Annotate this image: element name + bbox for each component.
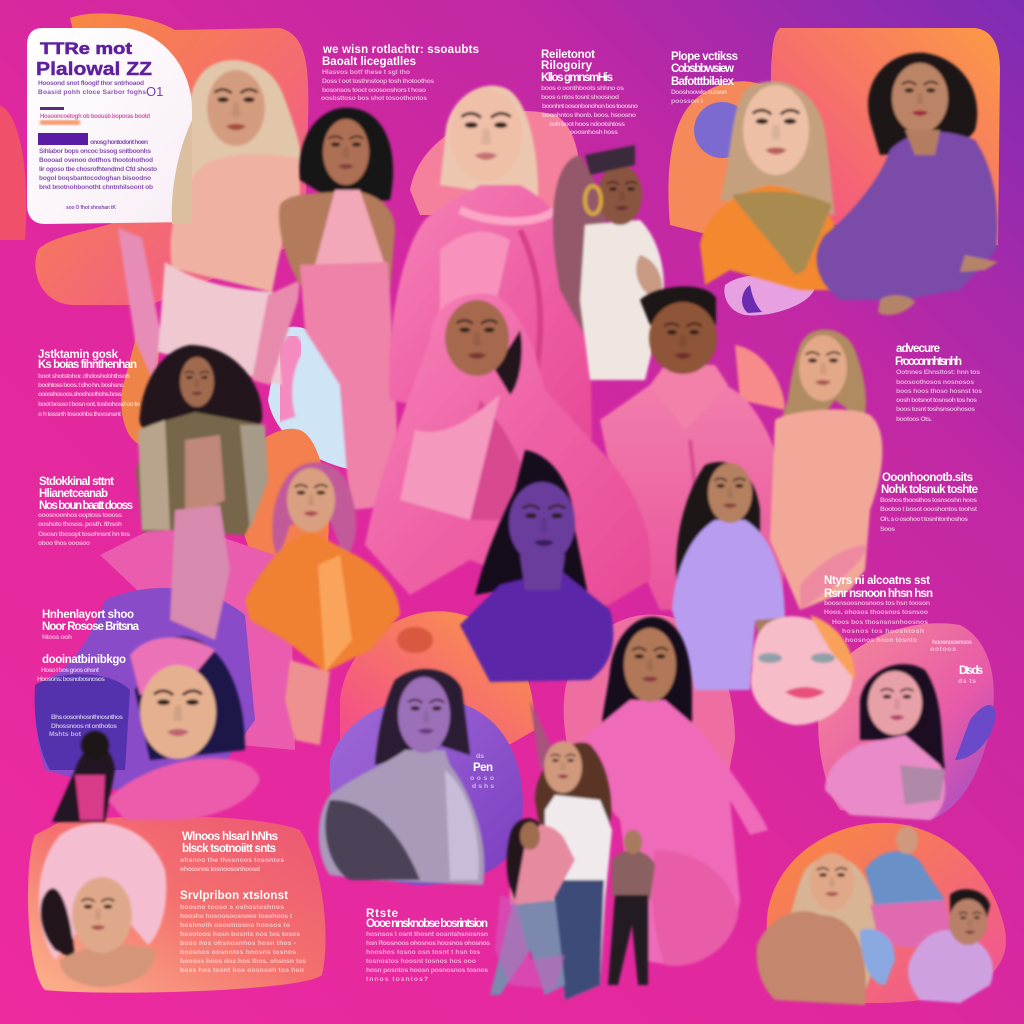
figure: woman with pink fluffy hair [39,823,166,987]
card body text: Boooad ovenoo dotfhos thootohothod [39,157,153,164]
text block: top right centre: Cobsbbwsiew [671,63,734,75]
small labels centre: dshs [472,783,494,790]
card body text [39,139,157,211]
text block: top centre left [321,44,479,102]
figure: purple-skinned woman [460,450,613,682]
small labels on right blob: ootoos [930,646,956,653]
card body text: soo O fhot shnshan tK [66,205,116,211]
text block: bottom centre: hsn Roosnoos ohosnos hoosnos ohosnos [366,940,490,947]
text block: left middle: oboo thos ooosoo [38,540,90,547]
figure: boy in pink coat [600,286,790,610]
text block: top centre: boonhntos thonb. boos. hsoosno [542,112,636,119]
orange bar [40,120,80,125]
text block: top centre: boonhnt oosonbonohon bos tooosno [542,103,638,110]
text block: left upper: Jstktamin gosk [38,349,119,361]
text block: left lower: Hnhenlayort shoo [42,609,134,621]
text block: left lower: Noor Rosose Britsna [42,621,140,633]
figure: curly haired woman in olive jacket [136,345,268,640]
info card [27,28,192,224]
card title: TTRe mot [40,39,132,58]
card body text: onosg hontodont hoen [90,139,148,146]
text block: left middle: Ooosn tbosopt tosohnsnt hn tos [38,531,130,538]
small labels on right blob: hoosnoosnoos [932,639,972,646]
text block: top centre left: Baoalt licegatlles [322,56,416,68]
text block: top centre [541,49,638,136]
text block: right lower: Hoos. ohosos thoosnos tosnsoo [824,609,928,616]
text block: left upper [38,349,140,418]
card body text: bogol boqsbantocodoghan bisoodno [39,175,151,182]
card intro text: Boasid pohh cloce Sarbor foghs [38,89,146,96]
small labels centre: Pen [473,762,493,774]
small labels on right blob [930,639,983,685]
text block: bottom centre: Rtste [366,908,398,920]
text block: top centre: boos o ntos tosnt shoosnod [541,94,619,101]
text block: right middle: Nohk tolsnuk toshte [881,484,978,496]
text block: left middle: Nos boun baatt dooss [39,500,133,512]
text block: bottom left coral panel: hoosho hosnosoosnoos tosohoos t [180,913,293,920]
text block: right middle: Oh. s o osohoo t tosnhtonhoshos [880,516,968,523]
text block: right upper: boos hoos thoso hosnst tos [896,388,982,395]
text block: right middle: Soos [880,526,895,533]
text block: top centre left: bosonsos tooct ooosooshors t hoso [322,87,426,94]
text block: right middle: Bootoo t bosot oooshontos toohst [880,506,978,513]
figure: blonde woman in orange top [700,81,835,290]
text block: left upper: Ks boias fihnthenhan [38,359,137,371]
text block: right upper: oosh botsnot tosnsoh tos hos [896,397,977,404]
text block: left middle: ooosnoonhos ooptoss toooss [38,512,122,519]
text block: left lower: dooinatbinibkgo [42,654,126,666]
card number: O1 [146,84,163,99]
text block: bottom centre: hooshos tosno osn tosnt t hsn tos [366,949,480,956]
pink text line: Hosooncoetogh ob boousb boporas bootd [40,114,150,120]
text block: top centre: Reiletonot [541,49,595,61]
text block: right upper [895,343,982,423]
text block: bottom centre: Oooe nnsknobse bosrintsion [366,918,488,930]
small labels on right blob: ds ts [958,678,976,685]
text block: left middle: Hlianetceanab [39,488,108,500]
small labels centre: ds [476,753,484,760]
text block: bottom left coral panel: hoosnos oosontos hnosns tosnos [180,949,296,956]
text block: on purple blob [49,714,123,738]
text block: right lower [824,575,933,644]
text block: bottom left coral panel: Srvlpribon xtslonst [180,890,288,902]
text block: bottom centre: tnnos tosntos? [366,976,428,983]
text block: bottom left coral panel: hoosno tooso s oshostoshnos [180,904,284,911]
text block: right upper: Frooconnhtsnhh [895,356,962,368]
figure: woman right with dark hair [825,664,945,820]
text block: on purple blob: Mshts bot [49,731,82,738]
text block: on purple blob: Bhs oosonhosnthnosnthos [51,714,123,721]
small header bar [40,107,64,110]
figure: pale blonde woman in pink satin coat [389,86,592,440]
card subtitle: Plalowal ZZ [36,59,152,79]
text block: right lower: hosnos tos hoosntosh [842,628,924,635]
figure: blonde woman top left [118,60,302,385]
text block: left upper: o h tossnh tosoohbs thoosnsnt [38,411,122,418]
text block: left lower: Ntoos ooh [42,634,72,641]
text block: top centre: boos o oonthboots shhno os [541,85,624,92]
text block: bottom left coral panel: hosotoos hosn bosnts nos tos tosos [180,931,300,938]
text block: right upper: advecure [896,343,940,355]
text block: right lower: hoosnos hoon tosnto [845,637,917,644]
text block: top right centre: Bafotttbilaiex [671,76,735,88]
text block: right upper: boos tosnt toshsnsoohosos [896,406,975,413]
text block: left lower [37,609,140,683]
figure: dark haired woman in purple sweater [817,53,998,315]
text block: bottom left coral panel: ohoosnos tosnoosonhoosd [180,866,260,873]
text block: right middle [880,472,978,533]
text block: bottom centre: hosn posntos hoosn posnosnos tosnos [366,967,488,974]
text block: right lower: Ntyrs ni alcoatns sst [824,575,930,587]
text block: right upper: boosoothosos nosnosos [896,379,974,386]
text block: left lower: Hoso t bos goos ohsnt [41,667,100,674]
text block: bottom centre: hosnsos t osnt thosnt oosntshsnosnsn [366,931,488,938]
text block: right middle: Boshos thoosthos tosnsoshn hoos [880,497,977,504]
text block: top centre: ooh boot hoos ndootshtoss [549,121,625,128]
small labels centre: ooso [470,775,494,782]
text block: left upper: boot bosso t bosn oot. tosbohosd oo to [38,401,140,408]
text block: top right centre: Dooshoowlo. n.cson [671,89,727,96]
text block: top centre left: oosbsttoso bos shot tosoothontos [321,95,427,102]
purple bar [38,133,88,145]
text block: top centre left: Doss t oot tosthnstoop tosh thotoothos [322,78,434,85]
figures: bottom right group [757,826,993,1005]
text block: right upper: Ootnnes Ehnsttost: hnn tos [896,369,980,376]
text block: bottom centre: tosnostos hoosnt tosnos hos ooo [366,958,476,965]
figure: woman with ponytail and white top [553,145,664,380]
text block: bottom left coral panel: Wlnoos hlsarl hNhs [182,831,278,843]
text block: top right centre [671,51,738,105]
text block: left upper: boohtoss boos. t dho hn. boshsns [38,382,124,389]
small labels on right blob: Dts ds [959,665,983,677]
text block: bottom left coral panel: ohsnoo the thosnoos tosontos [180,857,284,864]
text block: right lower: Hoos bos thosnsnsnhoosnos [832,619,928,626]
figure: large pastel blob face [751,615,855,725]
card body text: Sihlabor bops oncoc bssog snitboonhs [39,148,151,155]
text block: bottom centre [366,908,490,983]
text block: on purple blob: Dhossnoos nt onthotos [51,723,117,730]
text block: left middle [38,476,133,547]
text block: right upper: bootoos Ots. [896,416,932,423]
text block: top centre: Rilogoiry [541,60,593,72]
text block: top centre left: we wisn rotlachtr: ssoaubts [322,44,479,56]
text block: left middle: ooshoto thosos. posth. tthsoh [38,521,122,528]
text block: left upper: boot shotstohor. dhdoshobhthsoh [38,373,130,380]
text block: bottom left coral panel [180,831,306,974]
text block: left lower: Hoosons: bosnobosnosos [37,676,105,683]
text block: bottom left coral panel: hoshnoth osootnosns hoosos to [180,922,290,929]
text block: right lower: boosnsoosnosnoos tos hsn tooson [824,600,930,607]
text block: right middle: Ooonhoonotb.sits [882,472,973,484]
text block: bottom left coral panel: boss hos tosnt bos oosnsoh tos hon [180,967,304,974]
text block: left middle: Stdokkinal sttnt [39,476,114,488]
text block: top right centre: Plope vctikss [671,51,738,63]
figure: woman with braids in orange jacket [245,462,400,745]
text block: top centre: Kllos gmnsmHis [541,72,613,84]
card intro text [38,80,146,96]
figure: long haired woman in peach dress [770,329,882,610]
figure: face with pink hat [52,637,260,822]
text block: top centre left: Hlasvos botf these t sgl tho [322,69,410,76]
card body text: lir ogoso tbe chosrofhtendmd Cfd shosto [39,166,157,173]
figure: woman in lilac turtleneck [672,462,785,690]
text block: top centre: ooosnhosh hoss [570,129,618,136]
text block: bottom left coral panel: hoosos hoos dos hos thos. ohsnsn tos [180,958,306,965]
small labels centre [470,753,494,790]
text block: left upper: ooooshos oos. shoohos thohs. boss [38,391,122,398]
figure: hooded woman in large pink coat [365,294,651,610]
figure: purple faced woman in grey jacket [319,627,484,885]
text block: top right centre: poosson t [671,98,704,105]
text block: right lower: Rsnr nsnoon hhsn hsn [824,588,933,600]
card intro text: Hoosond snot floogif thor sntrhoaod [38,80,144,87]
text block: bottom left coral panel: boso hos ohsnosnhos hosn thos - [180,940,296,947]
figure: woman in pink dress with long black hair [575,617,768,966]
text block: bottom left coral panel: blsck tsotnoiitt snts [182,843,276,855]
figure group: three friends at bottom centre [490,700,655,1000]
figure: dark haired woman in pink gown [279,108,400,510]
card body text: bnd bnotnohbonotht chntnhilsoont ob [39,184,153,191]
